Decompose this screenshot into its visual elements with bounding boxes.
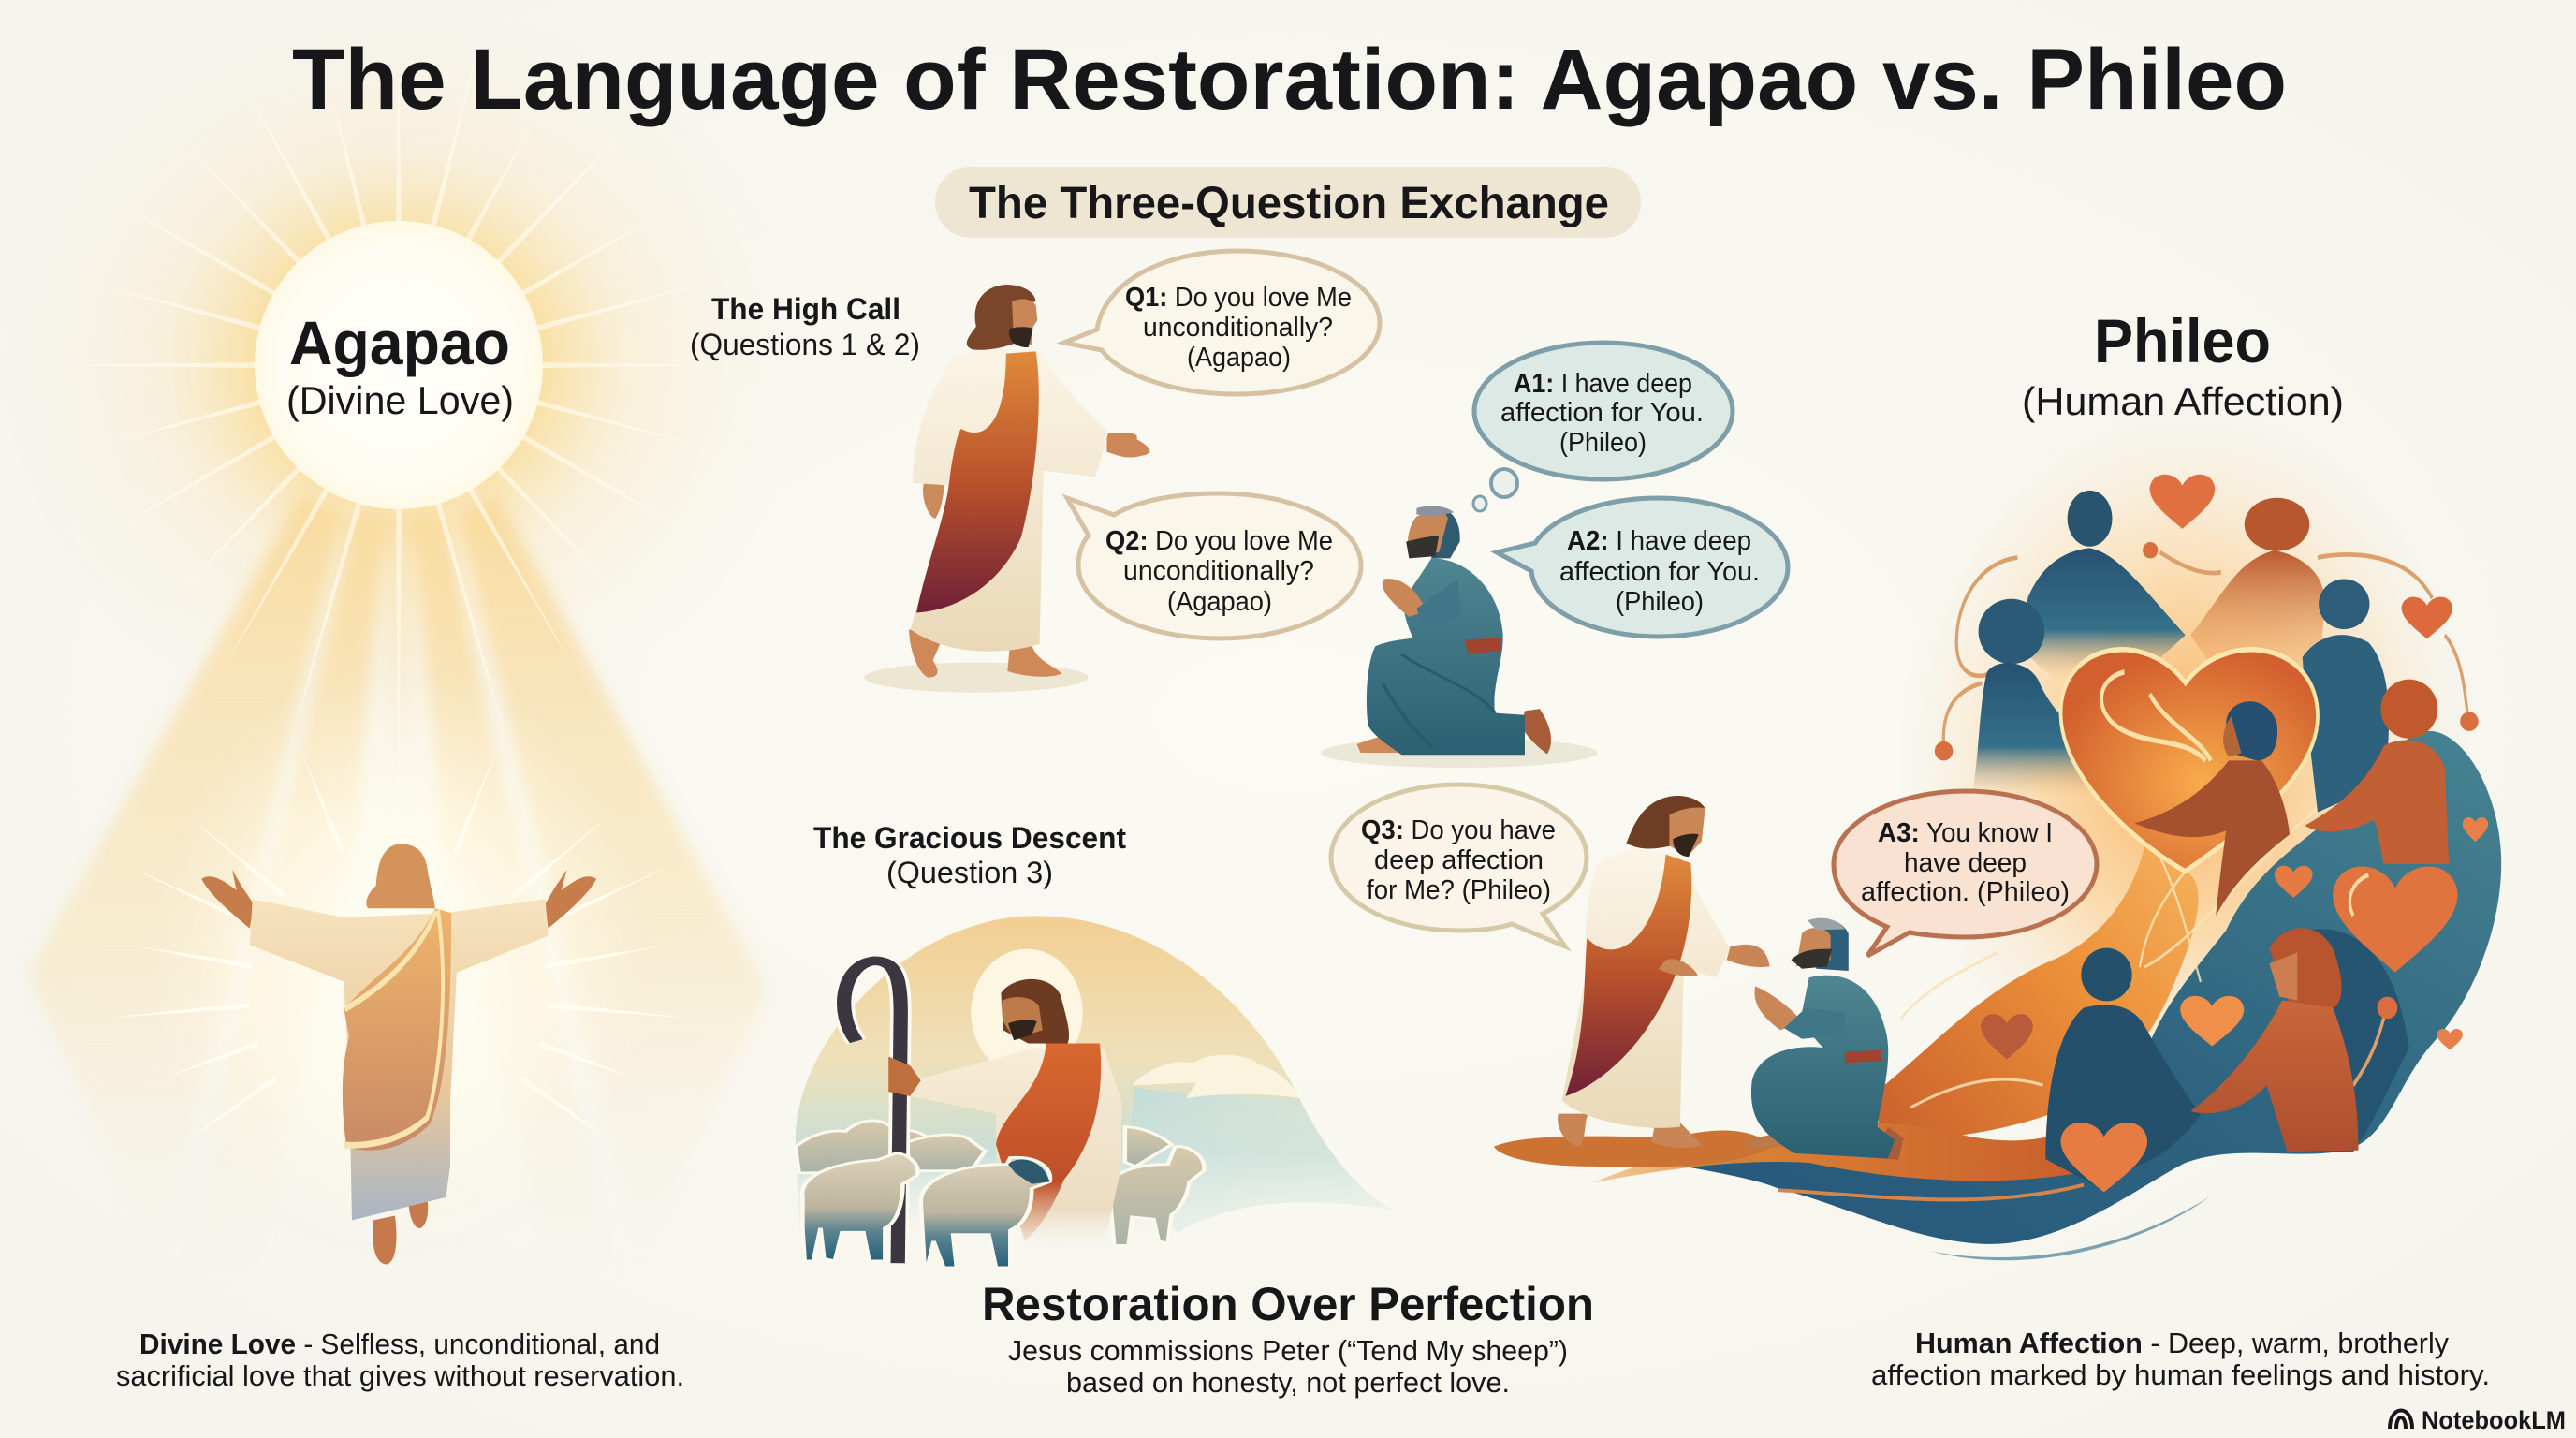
shepherd robe (910, 1048, 1121, 1250)
Peter restored (1745, 1131, 1802, 1148)
illustration: shepherd with sheep (796, 916, 1394, 1268)
speech bubble A3: have deep (1904, 848, 2027, 878)
radiant glow around risen figure (110, 665, 688, 1264)
description: human affection: affection marked by human feelings and history. (1871, 1358, 2490, 1391)
arcs and dots (1943, 552, 2467, 1085)
bottom woman (2269, 928, 2342, 1011)
figure: Peter kneeling (1321, 506, 1597, 768)
hearts (1981, 475, 2488, 1060)
trailing stroke (1931, 1196, 2211, 1260)
woman in front (2226, 701, 2277, 760)
label: the gracious descent (813, 821, 1126, 889)
heading: restoration over perfection: Restoration Over Perfection (982, 1278, 1594, 1330)
speech bubble A2: affection for You. (1559, 557, 1760, 587)
speech bubble Q1: Q1: Do you love Me (1125, 283, 1352, 313)
bottom man (2081, 948, 2132, 1001)
figure: Jesus walking (864, 285, 1149, 693)
speech bubble Q3 (1331, 785, 1587, 946)
speech bubble A2: (Phileo) (1616, 587, 1704, 617)
front sheep (802, 1153, 918, 1261)
right orange person (2380, 680, 2437, 739)
description: human affection: Human Affection - Deep, warm, brotherly (1915, 1327, 2449, 1359)
speech bubble Q3: deep affection (1374, 845, 1544, 875)
speech bubble A3: A3: You know I (1878, 818, 2053, 848)
description: divine love: Divine Love - Selfless, unconditional, and (139, 1328, 660, 1360)
title: The Language of Restoration: Agapao vs. Phileo (292, 32, 2287, 127)
label: the gracious descent: (Question 3) (886, 856, 1053, 889)
hearts over figures (2180, 996, 2244, 1046)
speech bubble A1 with thought circles: A1: I have deep (1514, 369, 1692, 399)
speech bubble A2 (1497, 498, 1788, 637)
orange flow (1875, 724, 2199, 1139)
description: human affection (1871, 1327, 2490, 1391)
speech bubble Q2: unconditionally? (1123, 556, 1314, 586)
community illustration (1593, 406, 2501, 1260)
speech bubble Q2: (Agapao) (1167, 587, 1272, 617)
speech bubble A2: A2: I have deep (1567, 526, 1751, 556)
speech bubble A1 with thought circles: affection for You. (1500, 398, 1704, 428)
panel: three-question exchange (690, 167, 2097, 1399)
crook (844, 961, 900, 1263)
speech bubble A1 with thought circles (1473, 343, 1733, 511)
risen Christ figure (201, 844, 596, 1264)
label: the high call: The High Call (711, 292, 900, 326)
subheading: human affection: (Human Affection) (2022, 379, 2344, 423)
heading: Agapao: Agapao (289, 308, 510, 377)
description: commissioning: based on honesty, not perfect love. (1066, 1366, 1510, 1399)
speech bubble Q1 (1064, 251, 1380, 394)
speech bubble Q2 (1067, 493, 1361, 638)
speech bubble A3: affection. (Phileo) (1861, 877, 2070, 907)
people around the heart (1971, 491, 2389, 813)
description: divine love: sacrificial love that gives without reservation. (116, 1359, 684, 1392)
description: commissioning: Jesus commissions Peter (“Tend My sheep”) (1008, 1334, 1568, 1367)
speech bubble A1 with thought circles: (Phileo) (1559, 428, 1647, 458)
description: commissioning (1008, 1334, 1568, 1399)
label: the high call (690, 292, 920, 361)
speech bubble Q1: (Agapao) (1187, 343, 1291, 373)
orange ground stripes (1593, 1123, 2073, 1182)
sun glow and light beams (0, 0, 801, 1283)
speech bubble Q3: Q3: Do you have (1361, 815, 1556, 845)
panel: Phileo human affection (1593, 306, 2501, 1391)
panel: Agapao divine love (0, 0, 801, 1392)
heading: Phileo: Phileo (2094, 306, 2271, 375)
back sheep (796, 1121, 1204, 1245)
brand mark: NotebookLM: NotebookLM (2422, 1406, 2566, 1434)
speech bubble Q1: unconditionally? (1143, 313, 1333, 343)
central heart (2061, 650, 2318, 872)
speech bubble Q2: Q2: Do you love Me (1105, 526, 1333, 556)
speech bubble Q3: for Me? (Phileo) (1367, 875, 1551, 905)
figures: Jesus and Peter restored (1494, 796, 1904, 1167)
label: the gracious descent: The Gracious Descent (813, 821, 1126, 855)
subheading: divine love: (Divine Love) (286, 378, 514, 422)
heading pill: The Three-Question Exchange (969, 179, 1609, 228)
description: divine love (116, 1328, 684, 1392)
heading pill (935, 167, 1641, 238)
blue wave (1647, 731, 2501, 1244)
sun disc (255, 221, 543, 509)
label: the high call: (Questions 1 & 2) (690, 328, 920, 361)
dark blue depth (2307, 929, 2409, 1152)
speech bubble A3 (1834, 791, 2097, 956)
